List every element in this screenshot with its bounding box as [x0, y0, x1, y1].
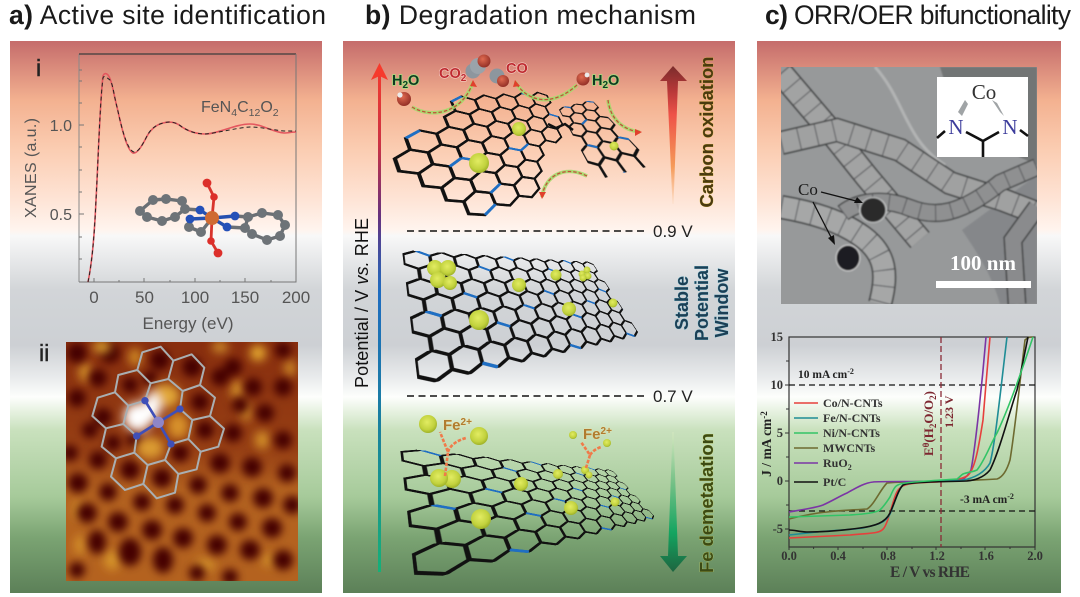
label E0(H2O/O2): θ [921, 442, 931, 447]
0.7 V threshold: 0.7 V [653, 387, 693, 406]
inset: Co-N coordination structure [937, 77, 1028, 157]
y axis label: -2 [759, 411, 769, 419]
x axis label: E / V vs RHE [890, 564, 970, 581]
y tick labels: 0.5 [50, 207, 72, 224]
graphene sheet: bottom [400, 450, 654, 576]
x tick labels: 50 [135, 288, 154, 307]
label 1.23 V: 1.23 V [942, 395, 956, 428]
inset: Co-N coordination structure: N [1002, 115, 1018, 139]
labels: H2O left: H [392, 73, 402, 89]
legend [794, 396, 883, 489]
graphene sheet: top right fragment [558, 100, 646, 178]
label E0(H2O/O2): E [921, 447, 936, 456]
panel: b) degradation mechanism [343, 41, 735, 593]
legend: Fe/N-CNTs [823, 411, 881, 425]
y axis label: J / mA cm [759, 419, 774, 477]
iron particles: middle sheet [427, 260, 618, 330]
label 10 mA cm-2: -2 [847, 367, 854, 376]
formula label: C [237, 99, 249, 116]
formula label: 4 [231, 107, 237, 119]
nanotube 4 [843, 167, 1037, 213]
label E0(H2O/O2): ) [921, 391, 936, 395]
label ii: ii [39, 340, 49, 366]
legend: 2 [848, 463, 852, 472]
nanotube 3 [781, 207, 884, 304]
label -3 mA cm-2: -2 [1007, 492, 1014, 501]
panel: a) active site identification [10, 41, 322, 593]
graphene sheet: top left fragment [392, 92, 563, 216]
label: CO2: 2 [461, 73, 467, 84]
labels: H2O left: 2 [402, 80, 408, 91]
panel c contents [759, 67, 1043, 581]
graphene sheet: middle [402, 250, 638, 383]
panel b overlay [352, 54, 993, 573]
formula label: FeN [201, 99, 231, 116]
x tick labels [89, 288, 310, 307]
label E0(H2O/O2): O/O [921, 400, 936, 424]
formula label: 12 [249, 107, 260, 119]
x axis label: Energy (eV) [142, 314, 234, 333]
reference lines [789, 337, 1035, 547]
graphene lattice overlay [92, 347, 224, 498]
label: stable potential window: Window [712, 268, 732, 337]
legend: MWCNTs [823, 441, 876, 455]
label: Fe2+ right: 2+ [601, 426, 612, 437]
molecules: water, CO2, CO [397, 54, 590, 106]
0.9 V threshold: 0.9 V [653, 222, 693, 241]
legend: RuO [823, 456, 848, 470]
Co particle label and arrows [798, 180, 863, 245]
label: Fe2+ left: Fe [443, 417, 461, 434]
panel a contents [23, 53, 310, 581]
x tick labels: 0 [89, 288, 99, 307]
bridge between top sheet fragments [548, 124, 573, 130]
scale bar 100 nm: 100 nm [950, 251, 1016, 275]
nanotube 1 [781, 73, 920, 240]
labels: H2O right: 2 [602, 80, 608, 91]
label: CO: CO [506, 61, 528, 77]
label -3 mA cm-2: -3 mA cm [960, 494, 1007, 506]
curves [789, 337, 1033, 538]
label E0(H2O/O2): (H [921, 428, 936, 443]
x axis ticks: 1.6 [978, 549, 994, 563]
formula label: 2 [273, 107, 279, 119]
labels: H2O left: O [408, 73, 419, 89]
TEM micrograph [781, 67, 1037, 304]
x tick labels: 100 [181, 288, 209, 307]
title: a) Active site identification: a) Active site identification [9, 0, 326, 30]
iron particles: top sheet [469, 122, 618, 173]
XANES chart [23, 54, 310, 333]
nanotube 2 [781, 130, 1037, 213]
STM image with lattice overlay [62, 341, 301, 585]
polarization chart [759, 330, 1043, 581]
legend: Ni/N-CNTs [823, 426, 880, 440]
legend: Pt/C [823, 475, 846, 489]
carbon corrosion dashed arrows [412, 80, 642, 199]
label: CO2: CO [439, 66, 461, 82]
nanotube 5 [1013, 207, 1037, 304]
y axis ticks: -5 [773, 522, 783, 536]
label E0(H2O/O2): 2 [928, 423, 938, 428]
y axis ticks: 15 [770, 330, 783, 344]
panel: c) ORR/OER bifunctionality [757, 41, 1061, 593]
x tick labels: 150 [231, 288, 259, 307]
inset: Co-N coordination structure: N [948, 115, 964, 139]
title: c) ORR/OER bifunctionality: c) ORR/OER bifunctionality [765, 0, 1072, 30]
label: Fe demetalation: Fe demetalation [696, 433, 717, 573]
Fe2+ release arrows [440, 432, 601, 476]
y tick labels: 1.0 [50, 118, 72, 135]
label E0(H2O/O2): 2 [928, 395, 938, 400]
label: carbon oxidation: Carbon oxidation [696, 56, 717, 208]
potential axis label: Potential / V vs. RHE [352, 218, 372, 388]
Co particle label and arrows: Co [798, 180, 818, 199]
y axis label: XANES (a.u.) [23, 118, 40, 218]
y axis ticks: 10 [770, 378, 783, 392]
y tick labels [50, 118, 72, 224]
label: stable potential window: Stable [672, 276, 692, 330]
label: stable potential window [672, 265, 732, 341]
label i: i [36, 55, 41, 81]
x axis ticks: 0.8 [880, 549, 896, 563]
x axis ticks: 0.0 [781, 549, 797, 563]
y axis ticks [770, 330, 783, 536]
inset: Co-N coordination structure: Co [972, 80, 996, 104]
label: stable potential window: Potential [692, 265, 712, 341]
labels: H2O right: O [608, 73, 619, 89]
potential axis arrow [371, 63, 388, 572]
formula label: O [260, 99, 273, 116]
label 10 mA cm-2: 10 mA cm [798, 369, 847, 381]
x axis ticks [781, 549, 1043, 563]
label: Fe2+ left: 2+ [461, 417, 472, 428]
legend: Co/N-CNTs [823, 396, 883, 410]
title: b) Degradation mechanism: b) Degradation mechanism [365, 0, 696, 30]
label: Fe2+ right: Fe [583, 426, 601, 443]
XANES curve [88, 74, 296, 282]
icon: FeN4C12O2 molecule [135, 179, 290, 257]
x axis ticks: 0.4 [830, 549, 847, 563]
y axis ticks: 5 [777, 426, 783, 440]
y axis ticks: 0 [777, 474, 783, 488]
arrow: Fe demetalation [660, 432, 687, 572]
labels: H2O right: H [592, 73, 602, 89]
x axis ticks: 2.0 [1027, 549, 1043, 563]
scale bar 100 nm [936, 251, 1031, 288]
x tick labels: 200 [282, 288, 310, 307]
arrow: carbon oxidation [660, 66, 687, 204]
iron particles: bottom sheet [419, 415, 620, 529]
x axis ticks: 1.2 [929, 549, 945, 563]
